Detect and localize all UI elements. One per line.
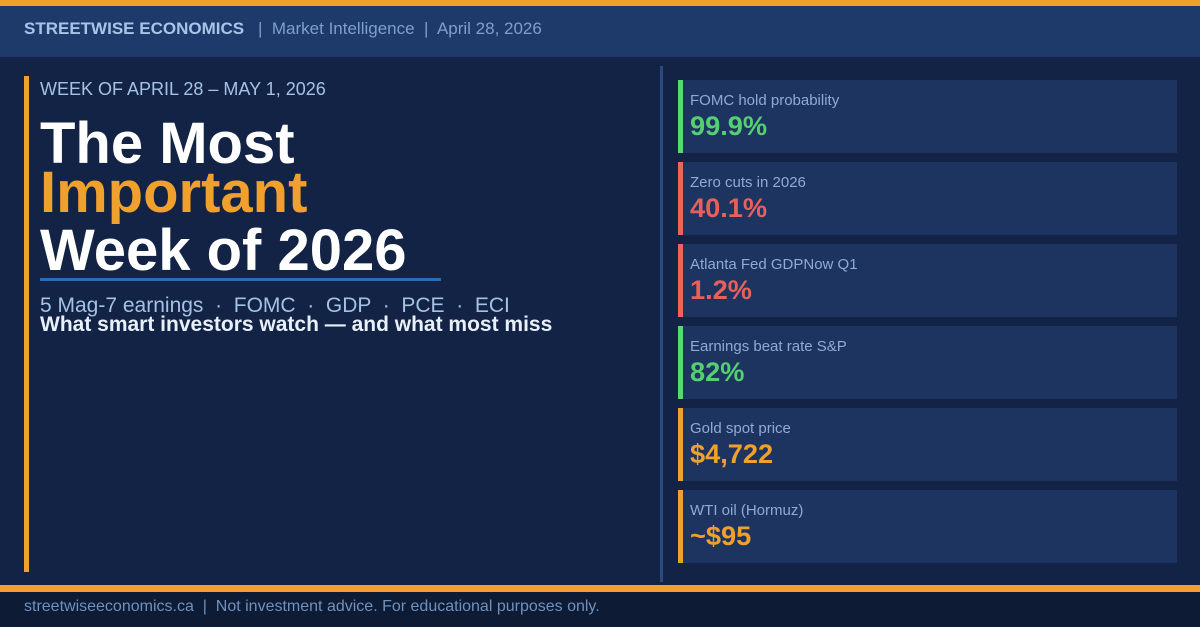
stat card: gold: Gold spot price — [690, 420, 791, 437]
stat card: zero cuts — [678, 162, 1177, 235]
top accent bar — [0, 0, 1200, 6]
stat card: oil: ~$95 — [690, 520, 751, 551]
stat card: oil: WTI oil (Hormuz) — [690, 502, 803, 519]
title — [40, 111, 406, 283]
stat card: FOMC: FOMC hold probability — [690, 92, 839, 109]
stat card: gold — [678, 408, 1177, 481]
stat card: earnings beat: Earnings beat rate S&P — [690, 338, 847, 355]
title underline — [40, 278, 441, 281]
footer band — [0, 592, 1200, 627]
footer accent bar — [0, 585, 1200, 592]
left accent bar — [24, 76, 29, 572]
stat card: GDPNow: 1.2% — [690, 274, 752, 305]
week label: WEEK OF APRIL 28 – MAY 1, 2026 — [40, 79, 326, 99]
title line 1: The Most — [40, 111, 295, 176]
subtitle topics: 5 Mag-7 earnings · FOMC · GDP · PCE · ECI — [40, 294, 510, 317]
stat card: gold: $4,722 — [690, 438, 773, 469]
stat card: FOMC: 99.9% — [690, 110, 767, 141]
panel divider — [660, 66, 663, 582]
header band — [0, 6, 1200, 57]
tagline: What smart investors watch — and what most miss — [40, 313, 552, 336]
footer text: streetwiseeconomics.ca | Not investment advice. For educational purposes only. — [24, 598, 600, 615]
stat card: earnings beat: 82% — [690, 356, 744, 387]
stat card: GDPNow — [678, 244, 1177, 317]
stat card: oil — [678, 490, 1177, 563]
stat card: GDPNow: Atlanta Fed GDPNow Q1 — [690, 256, 858, 273]
stat card: earnings beat — [678, 326, 1177, 399]
stat card: zero cuts: 40.1% — [690, 192, 767, 223]
header text: STREETWISE ECONOMICS | Market Intelligence | April 28, 2026 — [24, 19, 542, 38]
title line 3: Week of 2026 — [40, 218, 406, 283]
stat card: zero cuts: Zero cuts in 2026 — [690, 174, 806, 191]
stat card: FOMC — [678, 80, 1177, 153]
title line 2: Important — [40, 160, 307, 225]
